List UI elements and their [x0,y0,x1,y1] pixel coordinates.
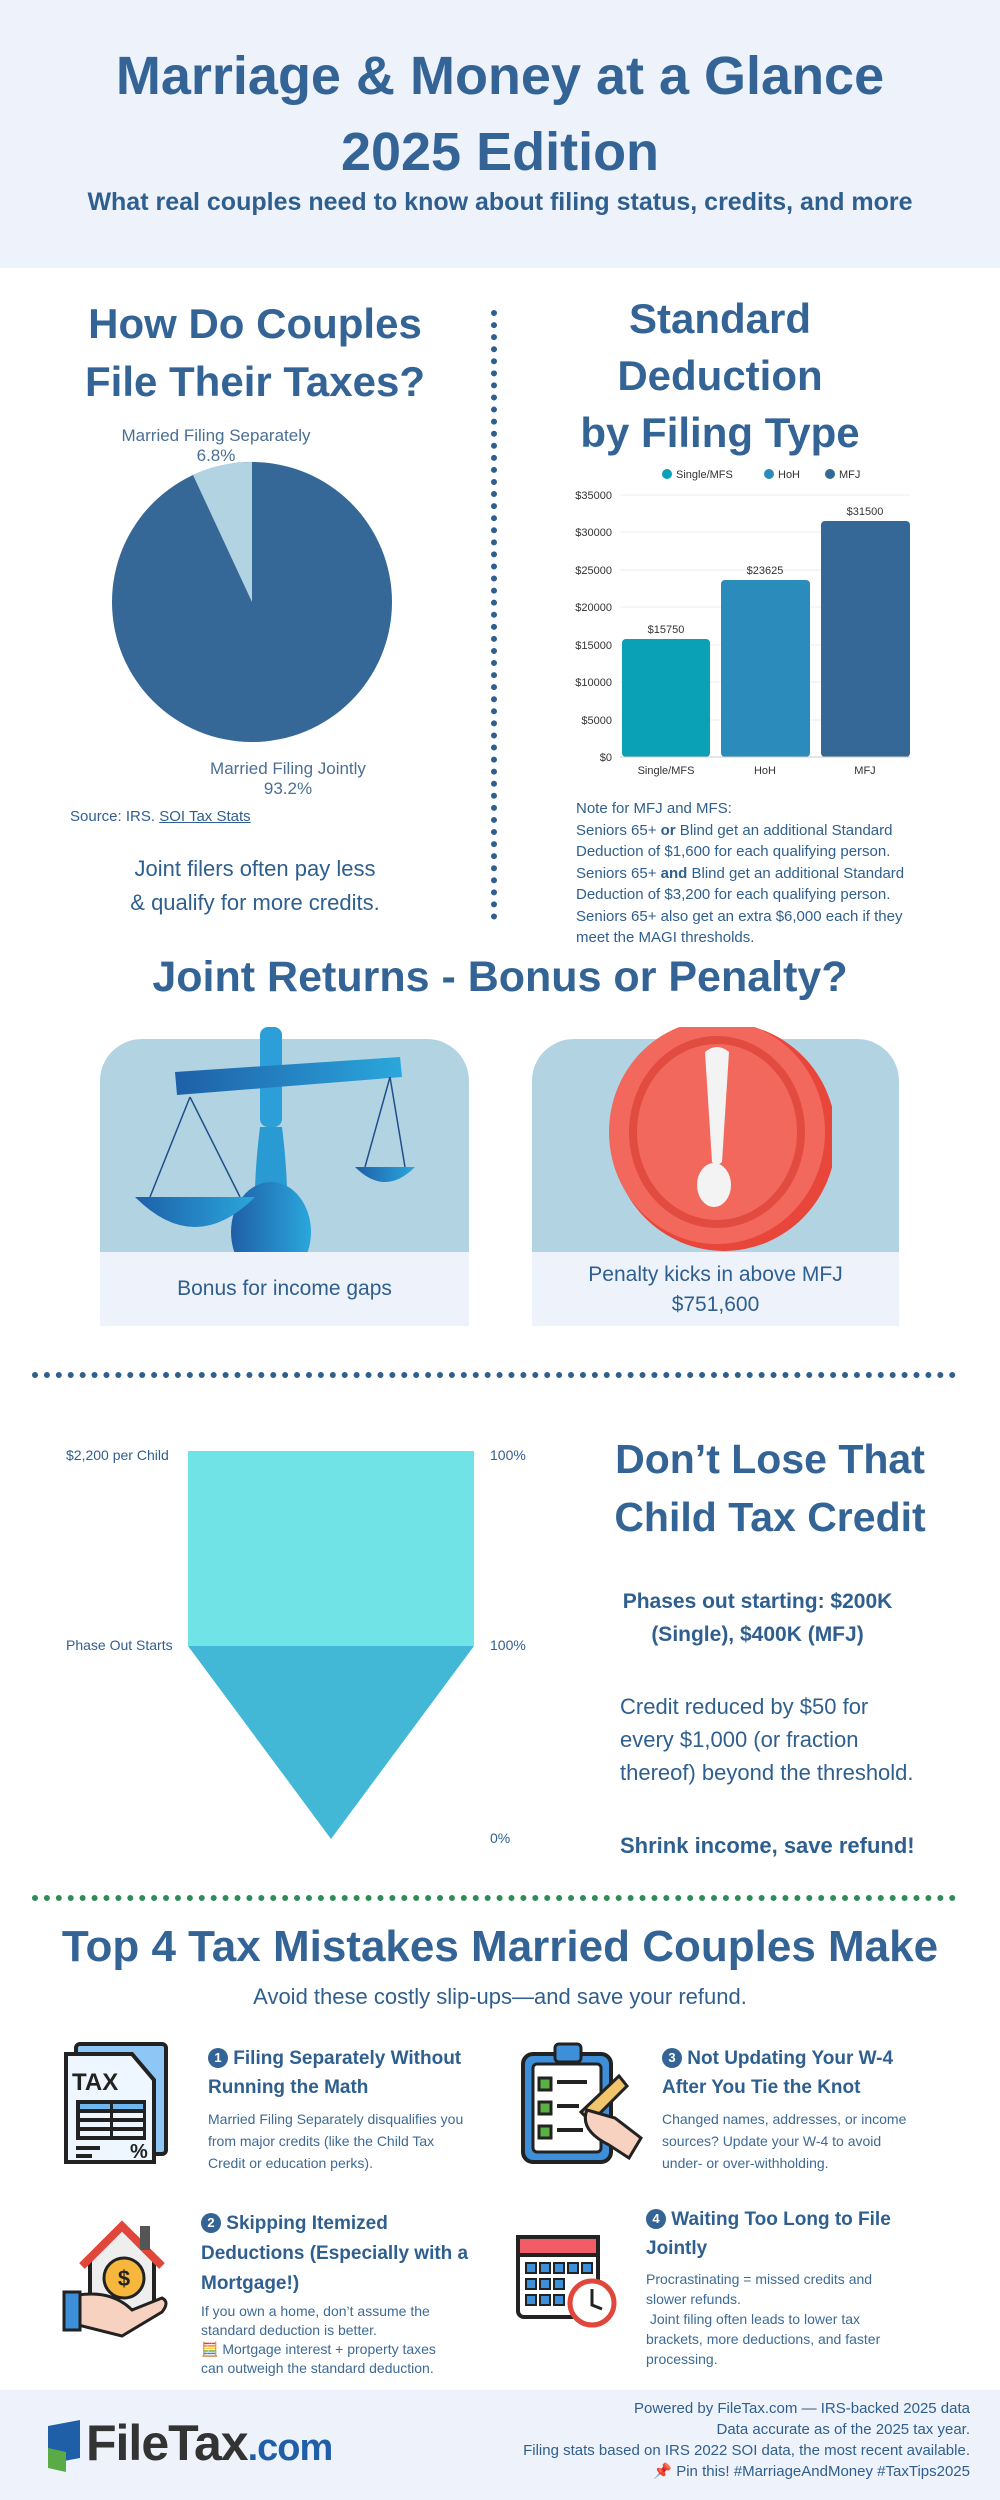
mistake 1 [64,2042,463,2171]
bar chart: MFJ [839,469,860,481]
subtitle: What real couples need to know about filing status, credits, and more [87,188,913,216]
footer credits [523,2400,970,2480]
caption: bonus: Bonus for income gaps [177,1277,392,1300]
caption: penalty: Penalty kicks in above MFJ [588,1263,843,1286]
title: Marriage & Money at a Glance [116,46,884,106]
source: Source: IRS. SOI Tax Stats [70,808,251,825]
mistake 2 [62,2213,468,2376]
text: mistake 4: 4 [652,2211,660,2226]
footer credits: Powered by FileTax.com — IRS-backed 2025 data [634,2400,970,2417]
bar chart: $15000 [575,640,612,652]
mistake 4 [516,2209,891,2367]
pie chart: Married Filing Jointly [210,759,366,778]
text: mistake 4: processing. [646,2351,718,2367]
bar chart: HoH [778,469,800,481]
note text: Deduction of $3,200 for each qualifying person. [576,886,890,903]
note text [576,800,904,946]
bar chart: $0 [600,752,612,764]
funnel chart: 100% [490,1637,526,1653]
icon: calendar clock [516,2235,616,2328]
funnel chart: $2,200 per Child [66,1447,169,1463]
bar chart [575,469,910,777]
icon: house in hand: $ [118,2266,130,2291]
bar chart: Single/MFS [676,469,733,481]
text: mistake 4: Waiting Too Long to File [671,2209,891,2230]
panel: filing pie [70,300,425,915]
heading: how do couples file [85,300,425,405]
pie chart [112,426,392,798]
mistake 3 [521,2042,906,2171]
caption: bonus [100,1252,469,1326]
bar chart: $5000 [581,715,612,727]
bar chart: $15750 [648,624,684,636]
text: mistake 3: Changed names, addresses, or income [662,2111,906,2127]
logo: FileTax.com [86,2415,332,2471]
funnel chart: 0% [490,1830,510,1846]
bar chart: $10000 [575,677,612,689]
note text: Deduction of $1,600 for each qualifying person. [576,843,890,860]
heading: standard deduction [580,295,860,456]
footer credits: 📌 Pin this! #MarriageAndMoney #TaxTips2025 [653,2463,970,2480]
caption: penalty: $751,600 [672,1293,759,1316]
icon: house in hand [62,2220,168,2338]
title: 2025 Edition [341,122,659,182]
heading: how do couples file: How Do Couples [88,300,422,347]
funnel chart: 100% [490,1447,526,1463]
text: mistake 3: After You Tie the Knot [662,2077,860,2098]
text: mistake 3: Not Updating Your W-4 [687,2048,893,2069]
heading: standard deduction: by Filing Type [580,409,860,456]
note text: meet the MAGI thresholds. [576,929,754,946]
reduction text: Credit reduced by $50 for [620,1694,868,1719]
text: mistake 2: Deductions (Especially with a [201,2243,468,2264]
icon: tax document: % [130,2141,148,2163]
bar chart: $31500 [847,506,883,518]
title [116,46,884,182]
reduction text: thereof) beyond the threshold. [620,1760,914,1785]
text: mistake 3: 3 [668,2050,676,2065]
funnel chart [66,1447,526,1846]
reduction text [620,1694,914,1785]
text: mistake 1: Running the Math [208,2077,368,2098]
bar chart: $35000 [575,490,612,502]
phase-out text: (Single), $400K (MFJ) [651,1623,864,1646]
phase-out text: Phases out starting: $200K [623,1590,892,1613]
pie chart: Married Filing Separately [122,426,311,445]
text: mistake 4: brackets, more deductions, and faster [646,2331,880,2347]
takeaway text [130,856,380,915]
header band [0,0,1000,268]
bar chart: $25000 [575,565,612,577]
text: mistake 2: 🧮 Mortgage interest + property taxes [201,2341,436,2357]
note text: Seniors 65+ and Blind get an additional Standard [576,864,904,882]
pie chart: 93.2% [264,779,312,798]
text: mistake 1: from major credits (like the Child Tax [208,2133,434,2149]
heading: top 4 mistakes: Top 4 Tax Mistakes Married Couples Make [62,1922,938,1971]
text: mistake 3: under- or over-withholding. [662,2155,829,2171]
takeaway text: & qualify for more credits. [130,890,380,915]
text: mistake 1: Filing Separately Without [233,2048,461,2069]
icon: tax document [64,2042,168,2164]
icon: clipboard [521,2042,643,2164]
card: bonus [100,1027,469,1326]
bar chart: HoH [754,765,776,777]
bar chart: $30000 [575,527,612,539]
text: mistake 2: 2 [207,2215,215,2230]
text: mistake 2: If you own a home, don’t assume the [201,2303,430,2319]
takeaway text: Joint filers often pay less [135,856,375,881]
note text: Seniors 65+ or Blind get an additional Standard [576,822,892,838]
pie chart: 6.8% [197,446,235,465]
heading: standard deduction: Standard [629,295,811,342]
text: mistake 1: 1 [214,2050,222,2065]
text: mistake 4: Procrastinating = missed credits and [646,2271,872,2287]
heading: child tax credit [614,1436,926,1540]
footer credits: Filing stats based on IRS 2022 SOI data, the most recent available. [523,2442,970,2459]
heading: how do couples file: File Their Taxes? [85,358,425,405]
text: mistake 2 [201,2213,468,2376]
heading: child tax credit: Child Tax Credit [614,1494,926,1540]
funnel chart: Phase Out Starts [66,1637,173,1653]
text: mistake 2: Skipping Itemized [226,2213,388,2234]
bar chart: MFJ [854,765,876,777]
panel: child tax credit text [614,1436,926,1858]
bar chart: Single/MFS [638,765,694,777]
text: mistake 4: Jointly [646,2238,707,2259]
text: mistake 1 [208,2048,463,2171]
text: mistake 1: Married Filing Separately disqualifies you [208,2111,463,2127]
subheading: Avoid these costly slip-ups—and save your refund. [253,1984,747,2009]
heading: bonus or penalty: Joint Returns - Bonus or Penalty? [152,953,848,1001]
text: mistake 2: Mortgage!) [201,2273,299,2294]
text: mistake 1: Credit or education perks). [208,2155,373,2171]
text: mistake 4: slower refunds. [646,2291,741,2307]
caption: penalty [532,1252,899,1326]
icon: tax document: TAX [72,2069,118,2096]
panel: standard deduction [575,295,910,946]
bar chart: $23625 [747,565,783,577]
icon: scales [135,1027,415,1252]
footer [0,2390,1000,2500]
text: mistake 4 [646,2209,891,2367]
tagline: Shrink income, save refund! [620,1833,915,1858]
heading: standard deduction: Deduction [617,352,823,399]
note text: Note for MFJ and MFS: [576,800,732,817]
text: mistake 3: sources? Update your W-4 to avoid [662,2133,881,2149]
footer credits: Data accurate as of the 2025 tax year. [716,2421,970,2438]
phase-out text [623,1590,892,1646]
bar chart: $20000 [575,602,612,614]
text: mistake 2: standard deduction is better. [201,2322,377,2338]
icon: exclamation [609,1027,832,1251]
card: penalty [532,1027,899,1326]
reduction text: every $1,000 (or fraction [620,1727,858,1752]
text: mistake 2: can outweigh the standard deduction. [201,2360,434,2376]
text: mistake 4: Joint filing often leads to lower tax [650,2311,860,2327]
heading: child tax credit: Don’t Lose That [615,1436,925,1482]
text: mistake 3 [662,2048,906,2171]
note text: Seniors 65+ also get an extra $6,000 each if they [576,908,902,924]
